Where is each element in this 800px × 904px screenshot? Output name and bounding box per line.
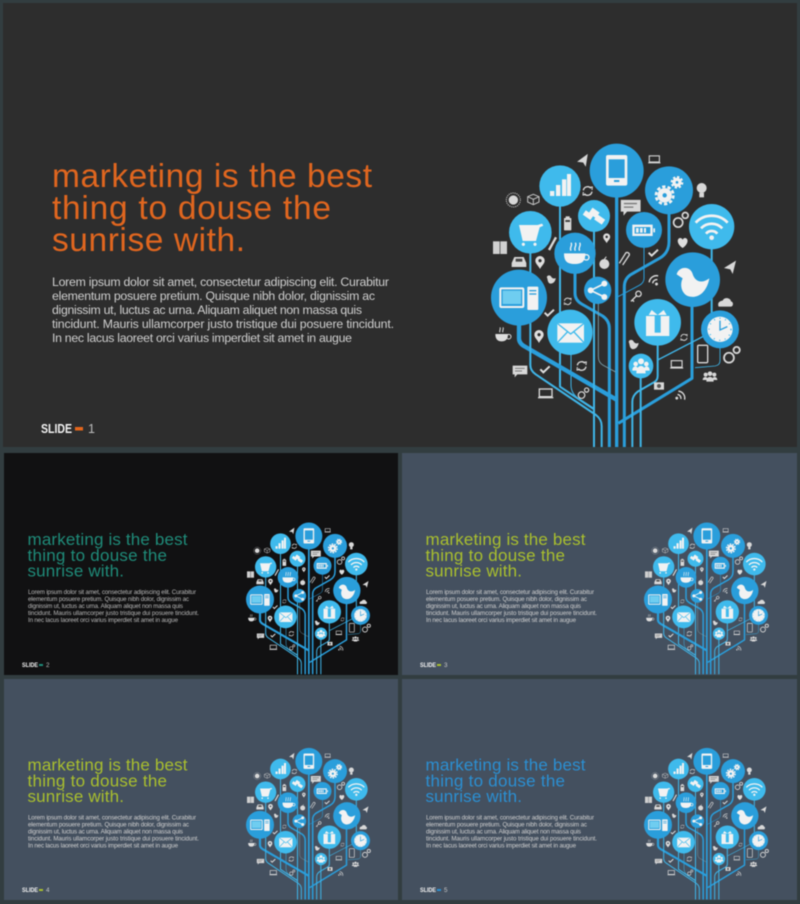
slide 4 body text	[28, 814, 199, 850]
slide 5 body text	[426, 814, 597, 850]
slide 2 body text: Lorem ipsum dolor sit amet, consectetur adipiscing elit. Curabitur	[28, 589, 196, 596]
slide 1 body text: Lorem ipsum dolor sit amet, consectetur adipiscing elit. Curabitur	[52, 275, 389, 289]
slide 1 label: 1	[88, 422, 95, 436]
slide 3 label: SLIDE	[420, 662, 436, 669]
slide 5 body text: elementum posuere pretium. Quisque nibh dolor, dignissim ac	[426, 822, 587, 828]
slide 2 label: SLIDE	[22, 662, 38, 669]
tree infographic: slide 3	[644, 523, 768, 674]
slide 5 label: SLIDE	[420, 887, 436, 894]
slide 2 body text: elementum posuere pretium. Quisque nibh dolor, dignissim ac	[28, 596, 189, 603]
slide 5 body text: tincidunt. Mauris ullamcorper justo tristique dui posuere tincidunt.	[426, 836, 597, 842]
slide 3 body text: elementum posuere pretium. Quisque nibh dolor, dignissim ac	[426, 596, 587, 603]
slide 2 title	[28, 530, 188, 580]
slide 5 title	[426, 756, 586, 806]
slide 4 title: thing to douse the	[28, 772, 167, 790]
slide 2 title: marketing is the best	[28, 530, 188, 549]
slide 5 body text: Lorem ipsum dolor sit amet, consectetur adipiscing elit. Curabitur	[426, 814, 594, 822]
slide 3 title: thing to douse the	[426, 546, 565, 565]
slide 4 body text: dignissim ut, luctus ac urna. Aliquam aliquet non massa quis	[28, 828, 183, 836]
slide 2 label	[22, 662, 50, 669]
slide 1 title: thing to douse the	[52, 190, 331, 227]
panel: slide 1	[3, 3, 797, 447]
slide 1 body text: elementum posuere pretium. Quisque nibh dolor, dignissim ac	[52, 289, 375, 303]
slide 3 label: 3	[444, 662, 448, 669]
slide 3 body text	[426, 589, 597, 624]
slide 4 body text: In nec lacus laoreet orci varius imperdiet sit amet in augue	[28, 842, 179, 850]
panel: slide 2	[4, 453, 398, 675]
slide 4 title: sunrise with.	[28, 787, 124, 806]
slide 4 title	[28, 756, 188, 806]
slide 1 body text: dignissim ut, luctus ac urna. Aliquam aliquet non massa quis	[52, 303, 362, 317]
slide 4 label	[22, 887, 50, 894]
slide 5 label: 5	[444, 887, 448, 894]
slide 4 label: 4	[46, 887, 50, 894]
slide 4 body text: Lorem ipsum dolor sit amet, consectetur adipiscing elit. Curabitur	[28, 814, 196, 822]
slide 1 title: sunrise with.	[52, 222, 245, 259]
slide 3 body text: dignissim ut, luctus ac urna. Aliquam aliquet non massa quis	[426, 603, 581, 610]
slide 5 title: sunrise with.	[426, 787, 522, 806]
tree infographic: slide 4	[246, 748, 370, 900]
slide 3 body text: Lorem ipsum dolor sit amet, consectetur adipiscing elit. Curabitur	[426, 589, 594, 596]
slide 2 title: thing to douse the	[28, 546, 167, 565]
slide 4 body text: elementum posuere pretium. Quisque nibh dolor, dignissim ac	[28, 822, 189, 828]
slide 1 label: SLIDE	[41, 422, 72, 436]
slide 1 label	[41, 422, 95, 436]
slide 3 title: sunrise with.	[426, 562, 522, 580]
slide 2 title: sunrise with.	[28, 562, 124, 580]
slide 4 title: marketing is the best	[28, 756, 188, 774]
slide 1 body text: In nec lacus laoreet orci varius imperdiet sit amet in augue	[52, 331, 352, 345]
slide 2 body text	[28, 589, 199, 624]
slide 3 title: marketing is the best	[426, 530, 586, 549]
slide 2 body text: tincidunt. Mauris ullamcorper justo tristique dui posuere tincidunt.	[28, 610, 199, 617]
slide 5 body text: In nec lacus laoreet orci varius imperdiet sit amet in augue	[426, 842, 577, 850]
slide 2 body text: In nec lacus laoreet orci varius imperdiet sit amet in augue	[28, 617, 179, 624]
panel: slide 4	[4, 679, 398, 900]
slide 3 title	[426, 530, 586, 580]
slide 3 body text: tincidunt. Mauris ullamcorper justo tristique dui posuere tincidunt.	[426, 610, 597, 617]
slide 5 body text: dignissim ut, luctus ac urna. Aliquam aliquet non massa quis	[426, 828, 581, 836]
slide 1 body text: tincidunt. Mauris ullamcorper justo tristique dui posuere tincidunt.	[52, 317, 394, 331]
slide 2 body text: dignissim ut, luctus ac urna. Aliquam aliquet non massa quis	[28, 603, 183, 610]
slide 3 label	[420, 662, 448, 669]
tree infographic: slide 1	[491, 144, 740, 447]
panel: slide 3	[402, 453, 797, 675]
slide 1 title	[52, 158, 373, 259]
panel: slide 5	[402, 679, 797, 900]
slide 1 title: marketing is the best	[52, 158, 373, 195]
slide 2 label: 2	[46, 662, 50, 669]
slide 4 body text: tincidunt. Mauris ullamcorper justo tristique dui posuere tincidunt.	[28, 836, 199, 842]
slide 4 label: SLIDE	[22, 887, 38, 894]
tree infographic: slide 2	[246, 523, 370, 674]
slide 5 title: thing to douse the	[426, 772, 565, 790]
tree infographic: slide 5	[644, 748, 768, 900]
slide 5 label	[420, 887, 448, 894]
slide 5 title: marketing is the best	[426, 756, 586, 774]
slide 3 body text: In nec lacus laoreet orci varius imperdiet sit amet in augue	[426, 617, 577, 624]
slide 1 body text	[52, 275, 394, 345]
